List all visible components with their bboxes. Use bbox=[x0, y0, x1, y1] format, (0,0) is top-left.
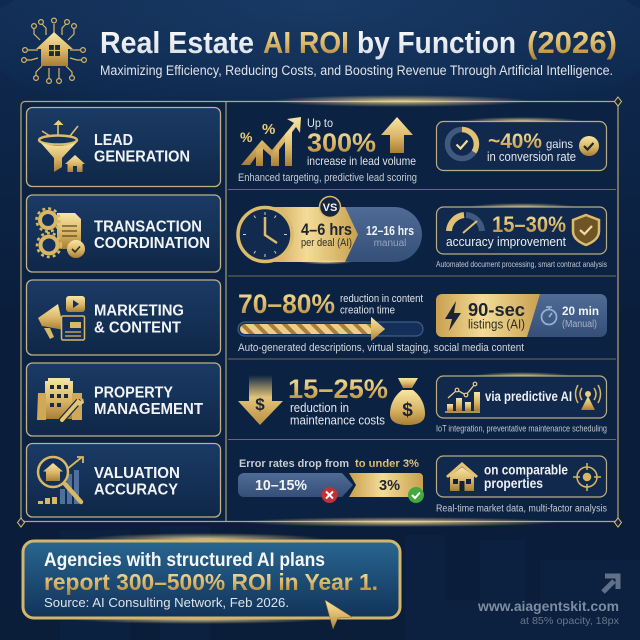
icon: magnifier, house and bars bbox=[38, 457, 83, 504]
icon: progress ring bbox=[448, 130, 476, 158]
icon: funnel with house bbox=[39, 120, 85, 172]
title: Real Estate bbox=[100, 25, 254, 60]
panel: valuation accuracy category bbox=[26, 444, 220, 517]
icon: green check bbox=[408, 487, 424, 503]
subtitle: Maximizing Efficiency, Reducing Costs, and Boosting Revenue Through Artificial Intelligence. bbox=[100, 63, 613, 78]
row 4: maintenance cost reduction: maintenance costs bbox=[290, 414, 385, 428]
row 3: content creation reduction: reduction in content bbox=[340, 293, 423, 305]
icon: money bag bbox=[390, 378, 425, 425]
row 1: lead volume stat: 300% bbox=[307, 128, 376, 158]
card: comparable properties bbox=[436, 456, 606, 497]
main frame bbox=[18, 95, 622, 527]
panel: lead generation category bbox=[26, 108, 220, 186]
card: listing speed comparison: 90-sec bbox=[468, 300, 525, 320]
row 1: lead volume stat: increase in lead volume bbox=[307, 154, 416, 168]
icon: bar chart with trend line bbox=[445, 382, 480, 412]
callout: ROI summary bbox=[23, 533, 400, 629]
row 5: error rate comparison: to under 3% bbox=[355, 458, 419, 470]
row 3: content creation reduction: creation time bbox=[340, 304, 395, 316]
row 4: maintenance cost reduction: 15–25% bbox=[288, 374, 388, 404]
icon: shield check bbox=[573, 215, 599, 245]
caption: market data: Real-time market data, multi-factor analysis bbox=[436, 504, 607, 514]
icon: antenna bbox=[576, 385, 600, 410]
row 2: hours per deal comparison bbox=[238, 196, 422, 264]
card: listing speed comparison: 20 min bbox=[562, 304, 599, 318]
website watermark: www.aiagentskit.com bbox=[477, 598, 619, 614]
bar: before and after: 10–15% bbox=[255, 477, 307, 494]
progress arrow bbox=[238, 317, 423, 341]
row 2: hours per deal comparison: 4–6 hrs bbox=[301, 220, 352, 239]
card: listing speed comparison: listings (AI) bbox=[468, 318, 525, 332]
card: listing speed comparison bbox=[436, 294, 607, 337]
title: by Function bbox=[357, 25, 516, 60]
title: (2026) bbox=[527, 25, 617, 60]
icon: lightning bbox=[445, 301, 461, 331]
website watermark bbox=[477, 576, 620, 627]
label: & CONTENT bbox=[94, 320, 182, 336]
bar: before and after: 3% bbox=[379, 477, 400, 494]
label: TRANSACTION bbox=[94, 218, 202, 236]
card: accuracy improvement bbox=[436, 203, 606, 254]
row 4: maintenance cost reduction: reduction in bbox=[290, 401, 349, 415]
icon: rising chart with percent signs: % bbox=[262, 121, 275, 138]
card: conversion rate: gains bbox=[546, 137, 573, 151]
icon: check badge bbox=[579, 136, 599, 156]
icon: megaphone and media bbox=[38, 296, 85, 340]
label: LEAD bbox=[94, 132, 133, 149]
card: comparable properties: on comparable bbox=[484, 462, 568, 478]
row 5: error rate comparison: Error rates drop from bbox=[239, 458, 349, 470]
row 2: hours per deal comparison: per deal (AI) bbox=[301, 237, 352, 249]
label: VALUATION bbox=[94, 465, 180, 482]
title bbox=[100, 25, 617, 60]
icon: gears and document bbox=[36, 208, 85, 258]
card: predictive AI bbox=[436, 372, 606, 418]
icon: red cross bbox=[322, 487, 338, 503]
row 4: maintenance cost reduction bbox=[238, 374, 425, 428]
caption: IoT integration: IoT integration, preventative maintenance scheduling bbox=[436, 424, 607, 434]
icon: clock bbox=[238, 208, 292, 262]
row 5: error rate comparison bbox=[238, 458, 424, 503]
row 1: lead volume stat: Enhanced targeting, predictive lead scoring bbox=[238, 172, 417, 184]
label: ACCURACY bbox=[94, 482, 179, 498]
label: MARKETING bbox=[94, 302, 184, 320]
card: predictive AI: via predictive AI bbox=[485, 389, 572, 404]
icon: diagonal arrow bbox=[603, 576, 618, 592]
card: comparable properties: properties bbox=[484, 475, 543, 491]
badge: vs: VS bbox=[323, 202, 337, 214]
icon: target bbox=[573, 463, 601, 491]
icon: building and wrench bbox=[37, 378, 84, 420]
icon: money bag: $ bbox=[402, 400, 413, 421]
callout: ROI summary: Agencies with structured AI plans bbox=[44, 550, 325, 571]
panel: marketing and content category bbox=[26, 280, 220, 355]
icon: rising chart with percent signs: % bbox=[240, 129, 253, 145]
card: accuracy improvement: 15–30% bbox=[492, 212, 566, 237]
icon: down arrow with dollar bbox=[238, 375, 283, 425]
icon: gauge bbox=[449, 215, 482, 233]
row 3: content creation reduction bbox=[238, 289, 524, 354]
icon: cursor arrow bbox=[325, 600, 352, 629]
icon: down arrow with dollar: $ bbox=[255, 395, 265, 414]
card: conversion rate bbox=[436, 117, 606, 170]
row 3: content creation reduction: 70–80% bbox=[238, 289, 335, 319]
card: conversion rate: ~40% bbox=[488, 130, 542, 153]
panel: transaction coordination category bbox=[26, 195, 220, 272]
row 2: hours per deal comparison: 12–16 hrs bbox=[366, 223, 414, 238]
icon: house bbox=[446, 462, 478, 491]
bar: before and after bbox=[238, 473, 423, 497]
row 1: lead volume stat bbox=[238, 116, 417, 184]
label: GENERATION bbox=[94, 148, 190, 166]
card: accuracy improvement: accuracy improvement bbox=[446, 234, 566, 249]
title: AI ROI bbox=[263, 25, 349, 60]
callout: ROI summary: report 300–500% ROI in Year 1. bbox=[44, 569, 378, 595]
badge: vs bbox=[320, 196, 340, 218]
row 3: content creation reduction: Auto-generated descriptions, virtual staging, social media content bbox=[238, 342, 524, 354]
callout: ROI summary: Source: AI Consulting Network, Feb 2026. bbox=[44, 596, 289, 610]
card: conversion rate: in conversion rate bbox=[487, 150, 576, 164]
icon: rising chart with percent signs bbox=[240, 117, 301, 166]
icon: stopwatch bbox=[542, 307, 556, 324]
card: listing speed comparison: (Manual) bbox=[562, 319, 597, 330]
website watermark: at 85% opacity, 18px bbox=[520, 615, 620, 627]
label: MANAGEMENT bbox=[94, 401, 204, 418]
row 2: hours per deal comparison: manual bbox=[374, 238, 406, 249]
icon: up arrow bbox=[381, 117, 413, 153]
row 1: lead volume stat: Up to bbox=[307, 116, 333, 130]
label: PROPERTY bbox=[94, 384, 174, 402]
label: COORDINATION bbox=[94, 235, 210, 252]
header logo: AI circuit house bbox=[22, 18, 86, 83]
panel: property management category bbox=[26, 363, 220, 436]
